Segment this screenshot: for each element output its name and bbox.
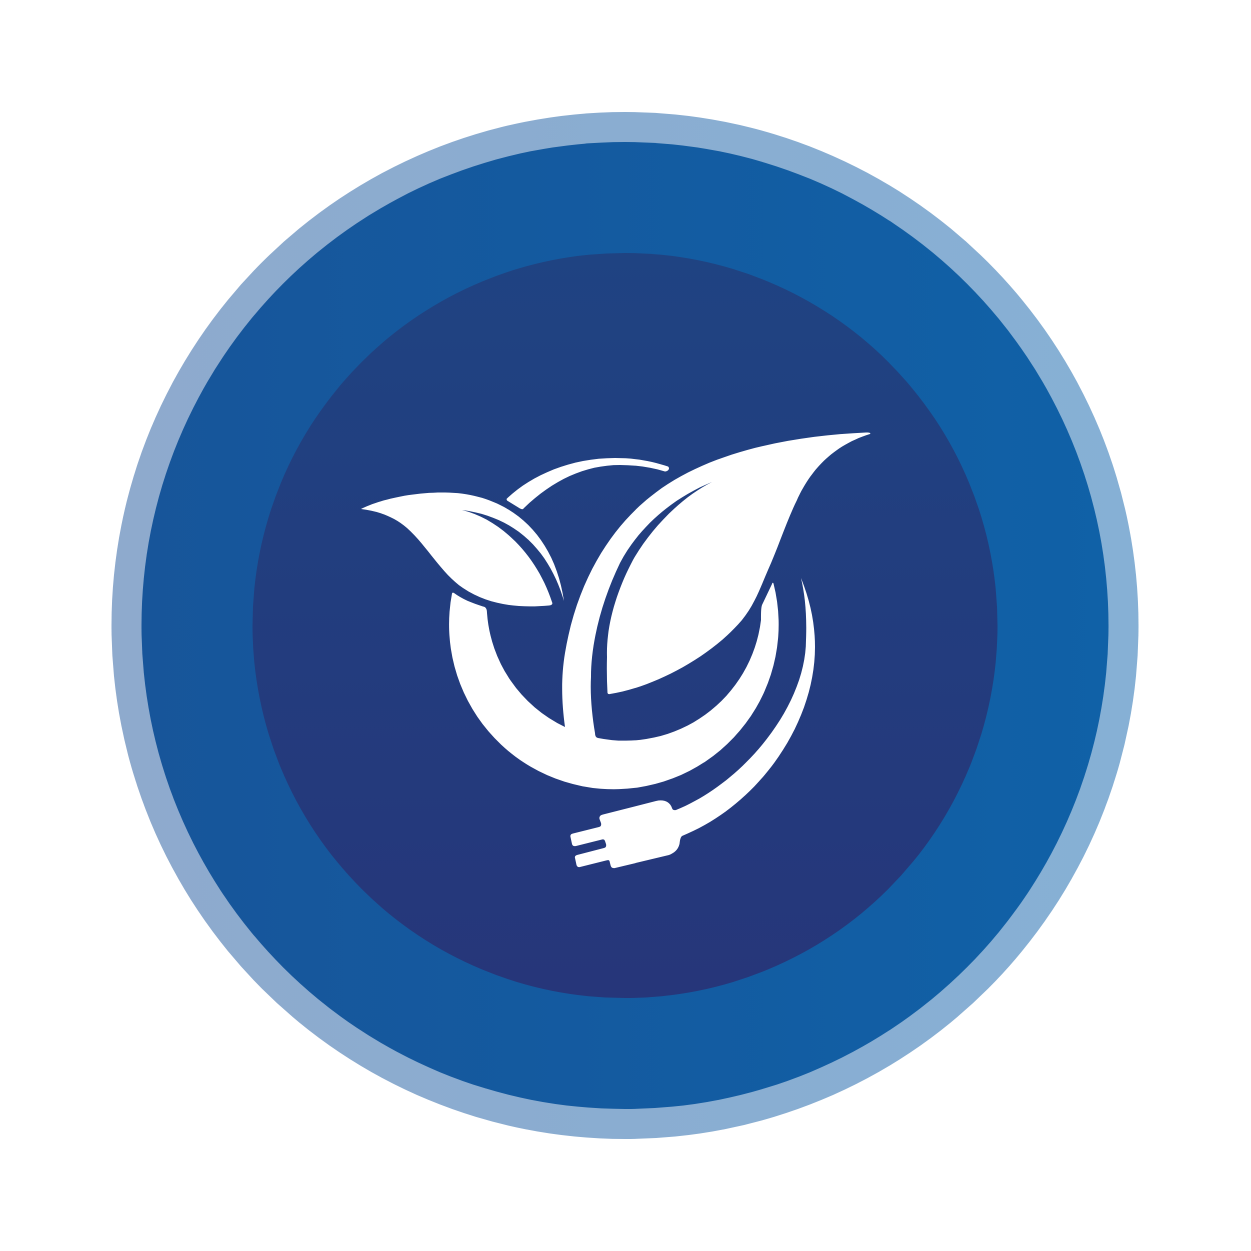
big leaf with stem and ring — [449, 432, 870, 789]
white logo mark — [361, 432, 870, 868]
small leaf — [361, 492, 564, 606]
inner dark blue disc — [252, 253, 998, 998]
power cord with plug — [570, 578, 815, 868]
outer light blue ring — [112, 112, 1138, 1139]
middle blue ring — [142, 142, 1108, 1109]
top arc — [506, 458, 669, 509]
